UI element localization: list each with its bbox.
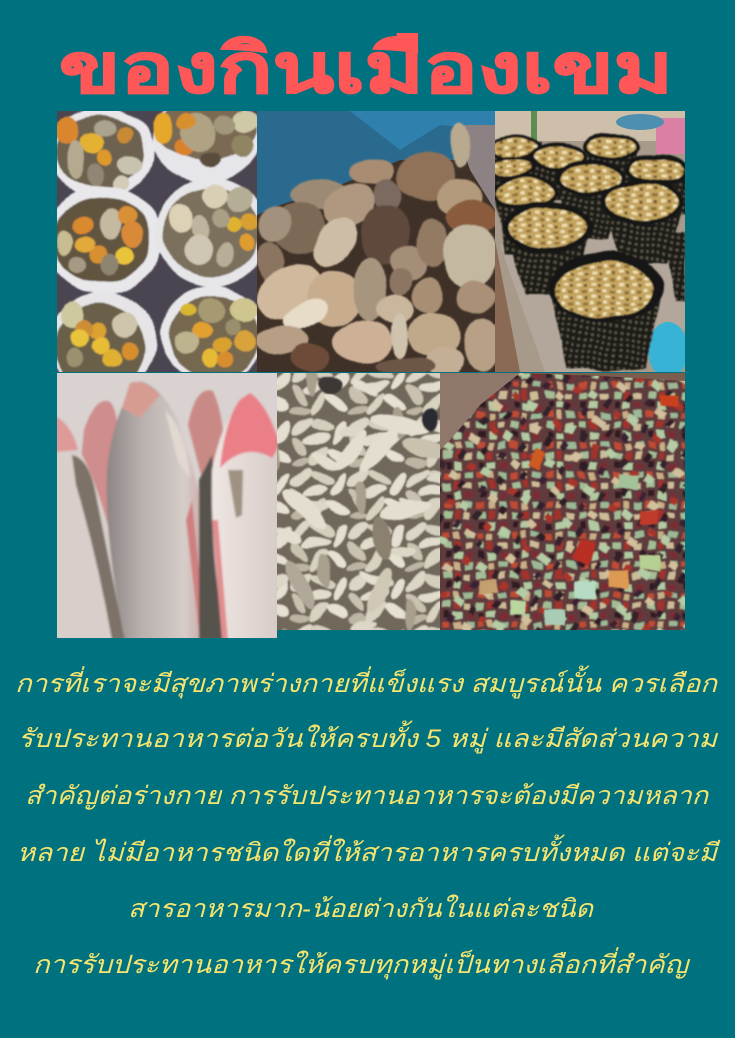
blue tarp: [257, 111, 455, 215]
left fish: [76, 454, 110, 564]
line 5: สารอาหารมาก-น้อยต่างกันในแต่ละชนิด: [128, 894, 595, 923]
photo: chopped colourful fruit mix: [440, 373, 685, 630]
basket row middle: [493, 175, 559, 255]
basket front: [502, 202, 592, 295]
photo: white grubs: [277, 373, 440, 630]
bag 4: [156, 179, 257, 288]
middle fish: [107, 381, 205, 640]
right fish: [210, 419, 254, 638]
basket row back: [495, 134, 543, 175]
line 2: รับประทานอาหารต่อวันให้ครบทั้ง 5 หมู่ และมีสัดส่วนความ: [18, 720, 719, 754]
line 1: การที่เราจะมีสุขภาพร่างกายที่แข็งแรง สมบูรณ์นั้น ควรเลือก: [15, 665, 719, 699]
bag 5: [57, 291, 158, 372]
dark gap: [199, 455, 226, 640]
bag 3: [46, 186, 162, 294]
title: ของกินเมืองเขม: [59, 31, 673, 107]
line 3: สำคัญต่อร่างกาย การรับประทานอาหารจะต้องมีความหลาก: [25, 782, 710, 810]
photo: fish: [55, 373, 280, 640]
line 6: การรับประทานอาหารให้ครบทุกหมู่เป็นทางเลือกที่สำคัญ: [33, 947, 691, 980]
photo: large pale mushrooms under blue tarp: [247, 111, 500, 377]
bag 6: [159, 286, 257, 372]
bag 1: [57, 111, 156, 192]
photo: mushrooms in white bags: [57, 111, 257, 372]
photo: black baskets of mushrooms: [487, 111, 689, 378]
body text: [15, 665, 721, 980]
bag 2: [152, 111, 257, 183]
small pink fish behind: [80, 401, 118, 530]
line 4: หลาย ไม่มีอาหารชนิดใดที่ให้สารอาหารครบทั้งหมด แต่จะมี: [17, 834, 721, 867]
